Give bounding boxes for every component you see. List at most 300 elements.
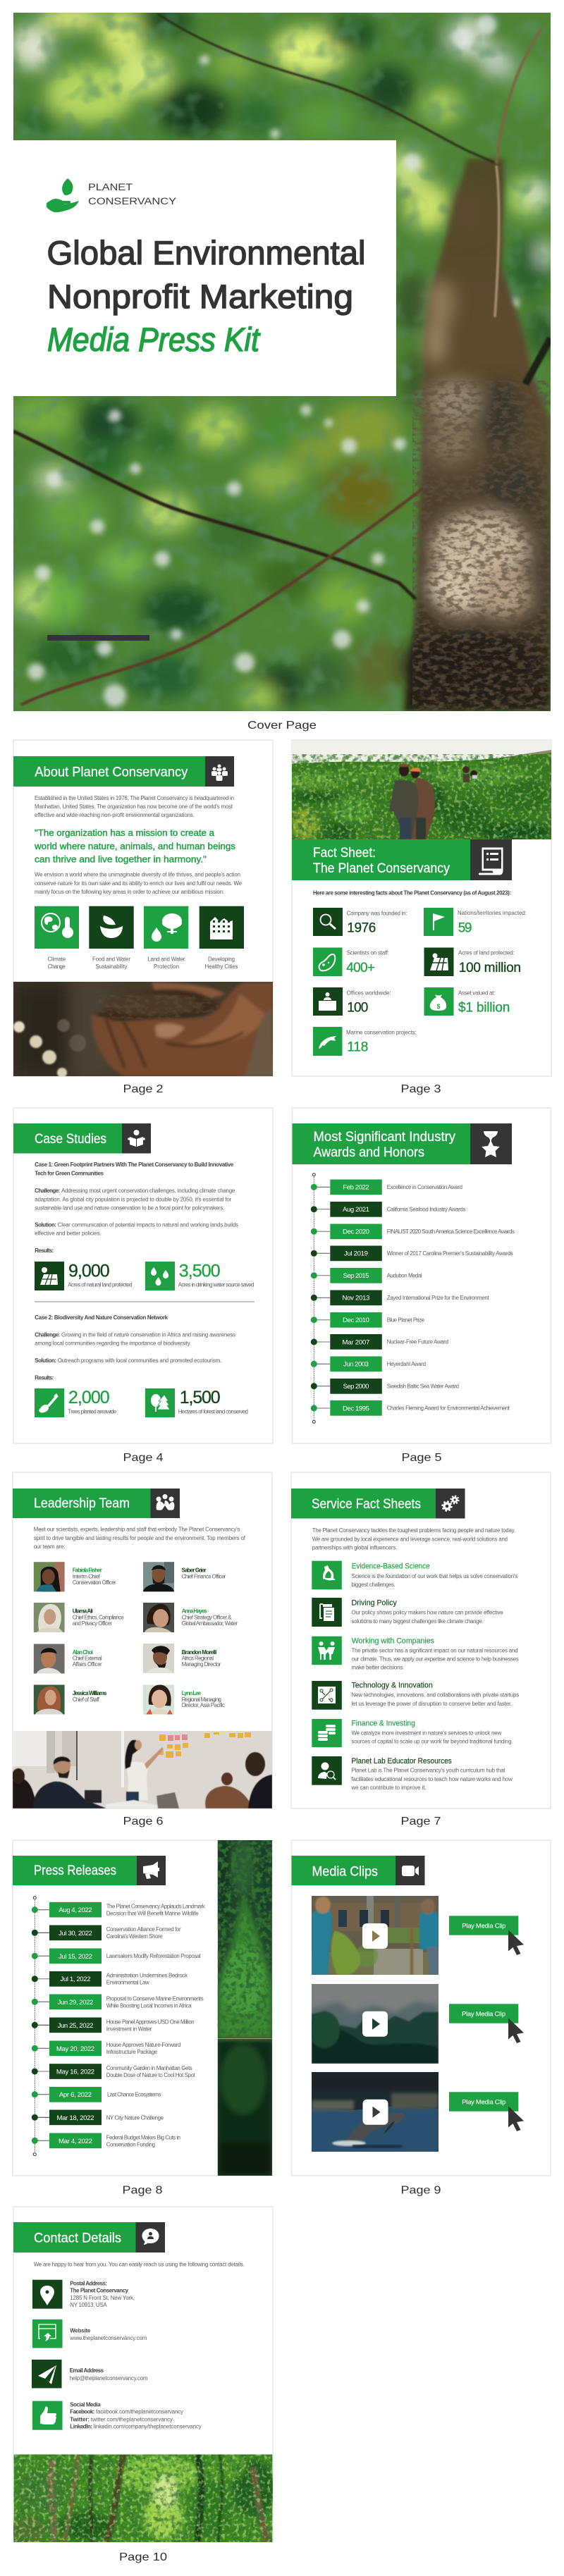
result: 1,500 hectares: Hectares of forest land conserved: [178, 1408, 248, 1415]
header: contact details: Contact Details: [34, 2231, 121, 2245]
header: services: [291, 1489, 465, 1518]
contact: email address: [32, 2360, 148, 2388]
person: Ulama Ali: Ulama Ali: [73, 1608, 93, 1614]
contact: social media: twitter.com/theplanetconservancy: [91, 2416, 173, 2422]
contact: email address: help@theplanetconservancy.com: [70, 2375, 148, 2381]
contact: postal address: 1285 N Front St, New York,: [70, 2295, 135, 2301]
service: finance: sources of capital to scale up our work far beyond traditional funding.: [351, 1738, 513, 1744]
key area: climate change: Change: [48, 963, 66, 970]
panel: page 3 fact sheet: [289, 740, 551, 1076]
photo: tree canopy and trunk: [13, 13, 551, 711]
icon: cursor: [508, 2018, 524, 2043]
release: Jun 29, 2022: Proposal to Conserve Marine Environments: [106, 1995, 204, 2002]
award: Dec 2020: [311, 1224, 515, 1239]
text: vision: [35, 872, 243, 895]
panel: page 4 case studies: [13, 1108, 273, 1443]
panel: page 2 about: [13, 740, 282, 1078]
release: Aug 4, 2022: Decision that Will Benefit Marine Wildlife: [106, 1910, 199, 1916]
panel: page 9 media clips: [292, 1840, 551, 2176]
cover heading: Media Press Kit: [47, 321, 261, 358]
case 2: [35, 1314, 235, 1381]
timeline: awards: [311, 1173, 515, 1423]
person: Anna Hayes: Chief Strategy Officer &: [182, 1614, 232, 1621]
button: play media clip 2: [449, 2004, 524, 2043]
stat: offices 100: 100: [347, 1000, 368, 1015]
stat: founded 1976: 1976: [347, 921, 376, 936]
service: technology: New technologies, innovations, and collaborations with private startups: [351, 1692, 519, 1699]
release: Mar 18, 2022: [32, 2110, 164, 2125]
header: media clips: Media Clips: [312, 1865, 378, 1880]
award: Jul 2019: Jul 2019: [344, 1250, 368, 1258]
contact: social media: Social Media: [70, 2402, 101, 2408]
release: Jul 1, 2022: Environmental Law: [106, 1980, 149, 1986]
text: leadership intro: Meet our scientists, experts, leadership and staff that embody The Planet Conservancy's: [34, 1527, 240, 1533]
award: Feb 2022: [311, 1180, 462, 1195]
release: Mar 18, 2022: NY City Nature Challenge: [106, 2114, 164, 2121]
stat: founded 1976: Company was founded in:: [347, 911, 407, 917]
person: Lynn Lee: Lynn Lee: [182, 1690, 202, 1696]
result: 2,000 trees: 2,000: [68, 1388, 110, 1407]
contact: social media: Facebook:: [70, 2409, 94, 2415]
award: Sep 2000: [311, 1379, 459, 1394]
text: intro: Established in the United States in 1976, The Planet Conservancy is headquartered in: [35, 795, 234, 801]
case 1: Tech for Green Communities: [35, 1171, 104, 1177]
result: 9,000 acres: 9,000: [68, 1262, 110, 1281]
icon: cursor: [508, 2106, 524, 2131]
release: Jul 15, 2022: Jul 15, 2022: [59, 1953, 92, 1961]
release: Jul 30, 2022: [32, 1925, 181, 1940]
release: Mar 4, 2022: Federal Budget Makes Big Cuts in: [106, 2134, 180, 2140]
contact: email address: Email Address: [70, 2367, 104, 2374]
case 2: Case 2: Biodiversity And Nature Conservation Network: [35, 1314, 168, 1321]
stat: offices 100: [313, 987, 391, 1016]
person: Brandon Morelli: [143, 1644, 221, 1673]
logo: CONSERVANCY: [88, 196, 176, 207]
contact: postal address: NY 10913, USA: [70, 2302, 107, 2308]
stat: founded 1976: [313, 908, 407, 936]
header: fact sheet: The Planet Conservancy: [313, 861, 450, 876]
award: Nov 2013: Zayed International Prize for the Environment: [387, 1295, 489, 1301]
result: 9,000 acres: Acres of natural land protected: [68, 1282, 133, 1288]
release: Jun 29, 2022: Jun 29, 2022: [58, 1999, 93, 2007]
release: May 16, 2022: Double Dose of Nature to Cool Hot Spot: [106, 2072, 195, 2078]
result: 1,500 hectares: [145, 1388, 248, 1417]
icon: team of people: [157, 1494, 174, 1510]
award: Aug 2021: California Seafood Industry Awards: [387, 1207, 465, 1212]
header: contact details: [13, 2222, 165, 2253]
panel: cover page: [9, 5, 558, 712]
release: May 20, 2022: Infrastructure Package: [106, 2049, 158, 2055]
button: play media clip 1: Play Media Clip: [462, 1922, 505, 1929]
award: Sep 2000: Sep 2000: [343, 1383, 369, 1391]
release: Mar 18, 2022: Mar 18, 2022: [56, 2114, 94, 2122]
award: Aug 2021: [311, 1202, 465, 1217]
contact: social media: Twitter:: [70, 2416, 90, 2422]
header: awards: [292, 1123, 512, 1164]
text: intro: effective and wide-reaching non-profit environmental organizations.: [35, 812, 195, 818]
logo: PLANET: [88, 182, 133, 192]
caption: page 3: Page 3: [400, 1083, 441, 1095]
release: May 16, 2022: May 16, 2022: [56, 2068, 94, 2076]
release: May 20, 2022: May 20, 2022: [56, 2045, 94, 2053]
release: Jul 30, 2022: Jul 30, 2022: [59, 1930, 92, 1937]
award: Sep 2015: Audubon Medal: [387, 1273, 422, 1278]
award: Mar 2007: Mar 2007: [343, 1338, 369, 1346]
contact: social media: linkedin.com/company/theplanetconservancy: [94, 2424, 202, 2430]
award: Dec 2010: Dec 2010: [343, 1317, 369, 1324]
result: 3,500 acres: Acres in drinking water source saved: [178, 1282, 254, 1288]
award: Jul 2019: [311, 1246, 513, 1261]
person: Brandon Morelli: Managing Director: [182, 1661, 221, 1668]
service: finance: [312, 1719, 513, 1747]
clip 2 thumbnail: misty forest: [309, 1984, 439, 2064]
release: Jul 1, 2022: Jul 1, 2022: [61, 1976, 90, 1983]
person: Anna Hayes: [143, 1603, 238, 1632]
text: intro: Here are some interesting facts about The Planet Conservancy (as of August 2023):: [313, 890, 511, 896]
person: Fabiola Fisher: [34, 1562, 116, 1591]
text: service intro: partnerships with global influencers.: [312, 1544, 397, 1551]
release: May 20, 2022: House Approves Nature-Forward: [106, 2042, 180, 2048]
header: leadership: Leadership Team: [34, 1496, 130, 1511]
trunk of the tree: [402, 159, 552, 711]
service: technology: Technology & Innovation: [351, 1682, 433, 1690]
people in the meeting: [12, 1740, 272, 1808]
release: Jul 15, 2022: Lawmakers Modify Reforestation Proposal: [106, 1953, 201, 1959]
panel: page 6 leadership: [12, 1472, 272, 1808]
result: 2,000 trees: [35, 1388, 117, 1417]
cover heading: Global Environmental: [47, 234, 365, 271]
award: Nov 2013: Nov 2013: [343, 1295, 369, 1302]
person: Jessica Williams: Chief of Staff: [73, 1696, 100, 1703]
contact: postal address: The Planet Conservancy: [70, 2288, 129, 2294]
release: Apr 6, 2022: Last Chance Ecosystems: [107, 2092, 161, 2098]
tree branches: [13, 14, 551, 705]
text: intro: Manhattan, United States. The organization has now become one of the world's most: [35, 803, 233, 810]
stat: assets $1 billion: [424, 987, 510, 1016]
workers: [390, 764, 477, 839]
service: science: biggest challenges.: [351, 1582, 396, 1588]
panel: page 8 press releases: [13, 1839, 272, 2176]
key area: healthy cities: [200, 906, 244, 970]
person: Fabiola Fisher: Fabiola Fisher: [73, 1567, 102, 1573]
caption: page 9: Page 9: [400, 2185, 441, 2196]
person: Fabiola Fisher: Interim Chief: [73, 1573, 100, 1580]
contact: social media: [32, 2401, 202, 2430]
service: policy: [312, 1598, 503, 1627]
stat: assets $1 billion: $1 billion: [458, 1000, 510, 1015]
icon: video camera: [402, 1866, 419, 1876]
text: leadership intro: [34, 1527, 246, 1550]
person: Lynn Lee: [143, 1684, 225, 1714]
service: companies: our climate. Thus, we apply our expertise and science to help businesses: [351, 1656, 519, 1663]
person: Saber Grier: [143, 1562, 226, 1591]
caption: page 10: Page 10: [119, 2551, 167, 2563]
case 1: Results:: [35, 1247, 54, 1254]
service: finance: We catalyze more investment in nature's services to unlock new: [351, 1730, 501, 1736]
text: service intro: We are grounded by local experience and leverage science, real-world solutions and: [312, 1536, 508, 1542]
photo: workers among young trees: [292, 741, 551, 839]
key area: healthy cities: Healthy Cities: [204, 963, 238, 970]
person: Saber Grier: Saber Grier: [182, 1567, 206, 1573]
release: Jul 1, 2022: [32, 1971, 188, 1987]
icon: document scroll: [479, 848, 503, 875]
caption: page 2: Page 2: [123, 1083, 164, 1095]
release: Aug 4, 2022: [32, 1902, 205, 1917]
service: policy: Driving Policy: [351, 1599, 397, 1608]
case 1: effective and better policies.: [35, 1231, 102, 1237]
photo: green forest path: [13, 2454, 273, 2542]
key area: healthy cities: Developing: [208, 956, 235, 963]
stat: acres 100 million: 100 million: [459, 961, 521, 975]
service: companies: [312, 1637, 519, 1671]
caption: cover page: Cover Page: [247, 720, 317, 732]
header: fact sheet: [292, 839, 512, 880]
case 2: Challenge:: [35, 1332, 60, 1338]
award: Dec 2010: Blue Planet Prize: [387, 1317, 425, 1324]
stat: acres 100 million: Acres of land protected:: [458, 950, 515, 956]
caption: page 5: Page 5: [402, 1452, 442, 1464]
decorative bar on cover: [47, 635, 149, 641]
release: Jun 25, 2022: Jun 25, 2022: [58, 2022, 93, 2030]
service: educator: Planet Lab Educator Resources: [351, 1757, 452, 1765]
icon: medal: [482, 1131, 500, 1157]
release: May 16, 2022: [32, 2064, 195, 2079]
clip 1 thumbnail: volunteers planting: [312, 1896, 439, 1975]
person: Ulama Ali: and Privacy Officer: [73, 1620, 112, 1627]
award: Sep 2000: Swedish Baltic Sea Water Award: [387, 1383, 459, 1390]
photo: team meeting: [13, 1731, 272, 1808]
award: Dec 2020: Dec 2020: [343, 1228, 369, 1236]
contact: website: [32, 2319, 147, 2348]
release: Mar 4, 2022: Mar 4, 2022: [59, 2138, 92, 2145]
stat: marine 118: [313, 1027, 417, 1056]
key area: land and water: Land and Water: [148, 956, 185, 963]
person: Alan Choi: Chief External: [73, 1655, 102, 1662]
release: Aug 4, 2022: Aug 4, 2022: [59, 1906, 92, 1914]
caption: page 4: Page 4: [123, 1452, 164, 1464]
service: finance: Finance & Investing: [351, 1719, 415, 1727]
sticky notes: [158, 1732, 251, 1758]
logo: [47, 178, 176, 212]
person: Brandon Morelli: Africa Regional: [182, 1655, 214, 1662]
service: educator: Planet Lab is The Planet Conservancy's youth curriculum hub that: [351, 1768, 505, 1774]
award: Mar 2007: Nuclear-Free Future Award: [387, 1339, 448, 1345]
case 2: Results:: [35, 1374, 54, 1381]
panel: page 5 awards: [292, 1108, 551, 1443]
award: Jul 2019: Winner of 2017 Carolina Premier's Sustainability Awards: [387, 1250, 513, 1257]
photo: forest strip and lake: [217, 1840, 272, 2176]
stat: marine 118: 118: [347, 1040, 368, 1055]
release: Jun 25, 2022: House Panel Approves USD One Million: [106, 2019, 195, 2025]
result: 2,000 trees: Trees planted areawide: [68, 1408, 117, 1415]
text: leadership intro: spirit to drive tangible and lasting results for people and the environment. Top members of: [34, 1535, 246, 1541]
person: Brandon Morelli: Brandon Morelli: [182, 1649, 216, 1656]
header: case studies: Case Studies: [35, 1132, 106, 1147]
caption: page 7: Page 7: [400, 1816, 441, 1828]
release: Jul 30, 2022: Conservation Alliance Formed for: [106, 1926, 181, 1933]
stat: nations 59: [424, 908, 527, 936]
timeline: press releases: [32, 1897, 205, 2156]
stat: assets $1 billion: $: [436, 1003, 441, 1010]
stat: offices 100: Offices worldwide:: [347, 990, 391, 997]
text: vision: mainly focus on the following key areas in order to achieve our ambitious mission:: [35, 889, 224, 895]
stat: scientists 400+: Scientists on staff:: [347, 950, 389, 956]
stat: scientists 400+: 400+: [346, 961, 375, 975]
key area: land and water: [144, 906, 188, 970]
header: fact sheet: Fact Sheet:: [313, 846, 376, 861]
stat: nations 59: 59: [458, 921, 472, 936]
case 2: Solution:: [35, 1357, 56, 1364]
case 1: sustainable land use and nature conservation to be a focal point for policymakers.: [35, 1204, 224, 1211]
award: Sep 2015: Sep 2015: [343, 1272, 369, 1280]
person: Jessica Williams: [34, 1684, 107, 1714]
button: play media clip 3: [449, 2092, 524, 2131]
stat: nations 59: Nations/territories impacted:: [458, 910, 527, 916]
header: press releases: [13, 1856, 166, 1885]
award: Nov 2013: [311, 1290, 489, 1305]
release: Apr 6, 2022: [32, 2087, 161, 2102]
quote: "The organization has a mission to create a: [35, 827, 215, 838]
award: Jun 2003: Jun 2003: [343, 1361, 369, 1369]
key area: food and water: [89, 906, 134, 970]
text: vision: conserve nature for its own sake and its ability to enrich our lives and fulfil our needs. We: [35, 880, 243, 887]
header: about: About Planet Conservancy: [35, 765, 188, 780]
clip 3 thumbnail: breaching whale: [312, 2072, 439, 2152]
key area: food and water: Sustainability: [96, 963, 128, 970]
result: 9,000 acres: [35, 1262, 133, 1290]
result: 1,500 hectares: 1,500: [180, 1388, 221, 1407]
contact: website: www.theplanetconservancy.com: [69, 2335, 147, 2341]
person: Anna Hayes: Global Ambassador, Water: [182, 1620, 238, 1627]
key area: land and water: Protection: [154, 963, 179, 970]
service: science: Science is the foundation of our work that helps us solve conservation's: [351, 1573, 517, 1579]
text: vision: We envision a world where the unimaginable diversity of life thrives, and people's action: [35, 872, 240, 878]
award: Dec 2020: FINALIST 2020 South America Science Excellence Awards: [387, 1228, 515, 1235]
divider: [35, 1301, 255, 1302]
case 2: Outreach programs with local communities and promoted ecotourism.: [58, 1357, 221, 1364]
service: science: Evidence-Based Science: [352, 1563, 430, 1571]
person: Jessica Williams: Jessica Williams: [73, 1690, 107, 1696]
person: Fabiola Fisher: Conservation Officer: [73, 1579, 116, 1586]
icon: people group: [212, 764, 228, 781]
key area: food and water: Food and Water: [92, 956, 130, 963]
person: Anna Hayes: Anna Hayes: [182, 1608, 207, 1614]
release: Jun 29, 2022: While Boosting Local Incomes in Africa: [106, 2002, 192, 2009]
award: Dec 2010: [311, 1312, 425, 1328]
contact: website: Website: [70, 2327, 91, 2334]
release: Mar 4, 2022: Conservation Funding: [106, 2141, 155, 2147]
quote: world where nature, animals, and human beings: [34, 841, 235, 851]
icon: reader with book: [128, 1130, 145, 1147]
icon: speech bubble with person: [142, 2229, 159, 2245]
case 1: [35, 1161, 238, 1254]
release: Jul 1, 2022: Administration Undermines Bedrock: [106, 1973, 188, 1979]
release: May 20, 2022: [32, 2041, 180, 2056]
panel: page 7 services: [291, 1472, 551, 1808]
person: Lynn Lee: Regional Managing: [182, 1696, 221, 1703]
header: media clips: [292, 1856, 424, 1885]
stat: marine 118: Marine conservation projects:: [346, 1029, 417, 1035]
service: companies: The private sector has a significant impact on our natural resources and: [351, 1647, 517, 1653]
header: case studies: [13, 1123, 151, 1153]
hands: [92, 982, 273, 1076]
release: Jul 15, 2022: [32, 1948, 201, 1964]
person: Saber Grier: Chief Finance Officer: [182, 1573, 226, 1580]
text: leadership intro: our team are:: [34, 1543, 65, 1550]
service: educator: [312, 1756, 513, 1791]
award: Dec 1995: Charles Fleming Award for Environmental Achievement: [387, 1405, 510, 1412]
play button: [362, 2011, 388, 2037]
cover heading: [47, 234, 365, 358]
stat: scientists 400+: [313, 947, 389, 976]
service: educator: we can contribute to improve it.: [351, 1785, 426, 1791]
header: leadership: [13, 1489, 180, 1518]
header: awards: Most Significant Industry: [313, 1130, 455, 1145]
icon: gears: [443, 1496, 458, 1511]
release: Jun 25, 2022: Investment in Water: [106, 2026, 152, 2032]
service: policy: Our policy shows policy makers how nature can provide effective: [351, 1610, 503, 1616]
award: Sep 2015: [311, 1268, 422, 1283]
text: contact intro: We are happy to hear from you. You can easily reach us using the following contact details.: [34, 2262, 245, 2268]
award: Feb 2022: Feb 2022: [343, 1184, 369, 1192]
release: Mar 4, 2022: [32, 2133, 180, 2148]
service: companies: Working with Companies: [352, 1637, 434, 1645]
soil: [95, 990, 220, 1021]
release: Apr 6, 2022: Apr 6, 2022: [59, 2091, 92, 2099]
release: Jul 30, 2022: Carolina's Western Shore: [106, 1933, 163, 1940]
case 1: Challenge:: [35, 1188, 60, 1194]
service: science: [312, 1561, 517, 1589]
award: Aug 2021: Aug 2021: [343, 1206, 369, 1214]
text: service intro: The Planet Conservancy tackles the toughest problems facing people and nature today.: [312, 1527, 515, 1534]
service: technology: let us leverage the power of disruption to conserve better and faster.: [351, 1701, 512, 1707]
button: play media clip 1: [449, 1916, 524, 1955]
result: 3,500 acres: [145, 1262, 254, 1290]
service: technology: [312, 1681, 519, 1710]
quote: [34, 827, 235, 865]
button: play media clip 2: Play Media Clip: [462, 2010, 505, 2017]
play button: [362, 1923, 388, 1949]
contact: postal address: [32, 2280, 135, 2309]
release: Jun 29, 2022: [32, 1995, 204, 2009]
person: Alan Choi: [34, 1644, 102, 1673]
photo: hands holding soil: [13, 982, 273, 1076]
case 1: Solution:: [35, 1222, 56, 1228]
person: Lynn Lee: Director, Asia Pacific: [182, 1702, 225, 1708]
play button: [362, 2100, 388, 2125]
caption: page 6: Page 6: [123, 1816, 164, 1828]
text: service intro: [312, 1527, 515, 1551]
header: about: [13, 756, 234, 787]
title card: [13, 140, 396, 396]
header: services: Service Fact Sheets: [312, 1497, 421, 1512]
cover heading: Nonprofit Marketing: [47, 278, 353, 315]
award: Dec 1995: Dec 1995: [343, 1405, 369, 1412]
award: Jun 2003: [311, 1356, 426, 1372]
header: awards: Awards and Honors: [313, 1145, 424, 1160]
contact: postal address: Postal Address:: [70, 2281, 107, 2286]
case 1: Addressing most urgent conservation challenges, including climate change: [61, 1188, 235, 1194]
case 1: adaptation. As global city population is projected to double by 2050, it's essential for: [35, 1196, 232, 1202]
release: May 16, 2022: Community Garden in Manhattan Gets: [106, 2065, 192, 2071]
award: Jun 2003: Heyerdahl Award: [387, 1361, 426, 1367]
key area: climate change: [35, 906, 79, 970]
person: Alan Choi: Alan Choi: [73, 1649, 93, 1656]
result: 3,500 acres: 3,500: [179, 1262, 221, 1281]
button: play media clip 3: Play Media Clip: [462, 2098, 505, 2105]
person: Ulama Ali: Chief Ethics, Compliance: [73, 1614, 124, 1621]
release: Aug 4, 2022: The Planet Conservancy Applauds Landmark: [106, 1903, 205, 1909]
